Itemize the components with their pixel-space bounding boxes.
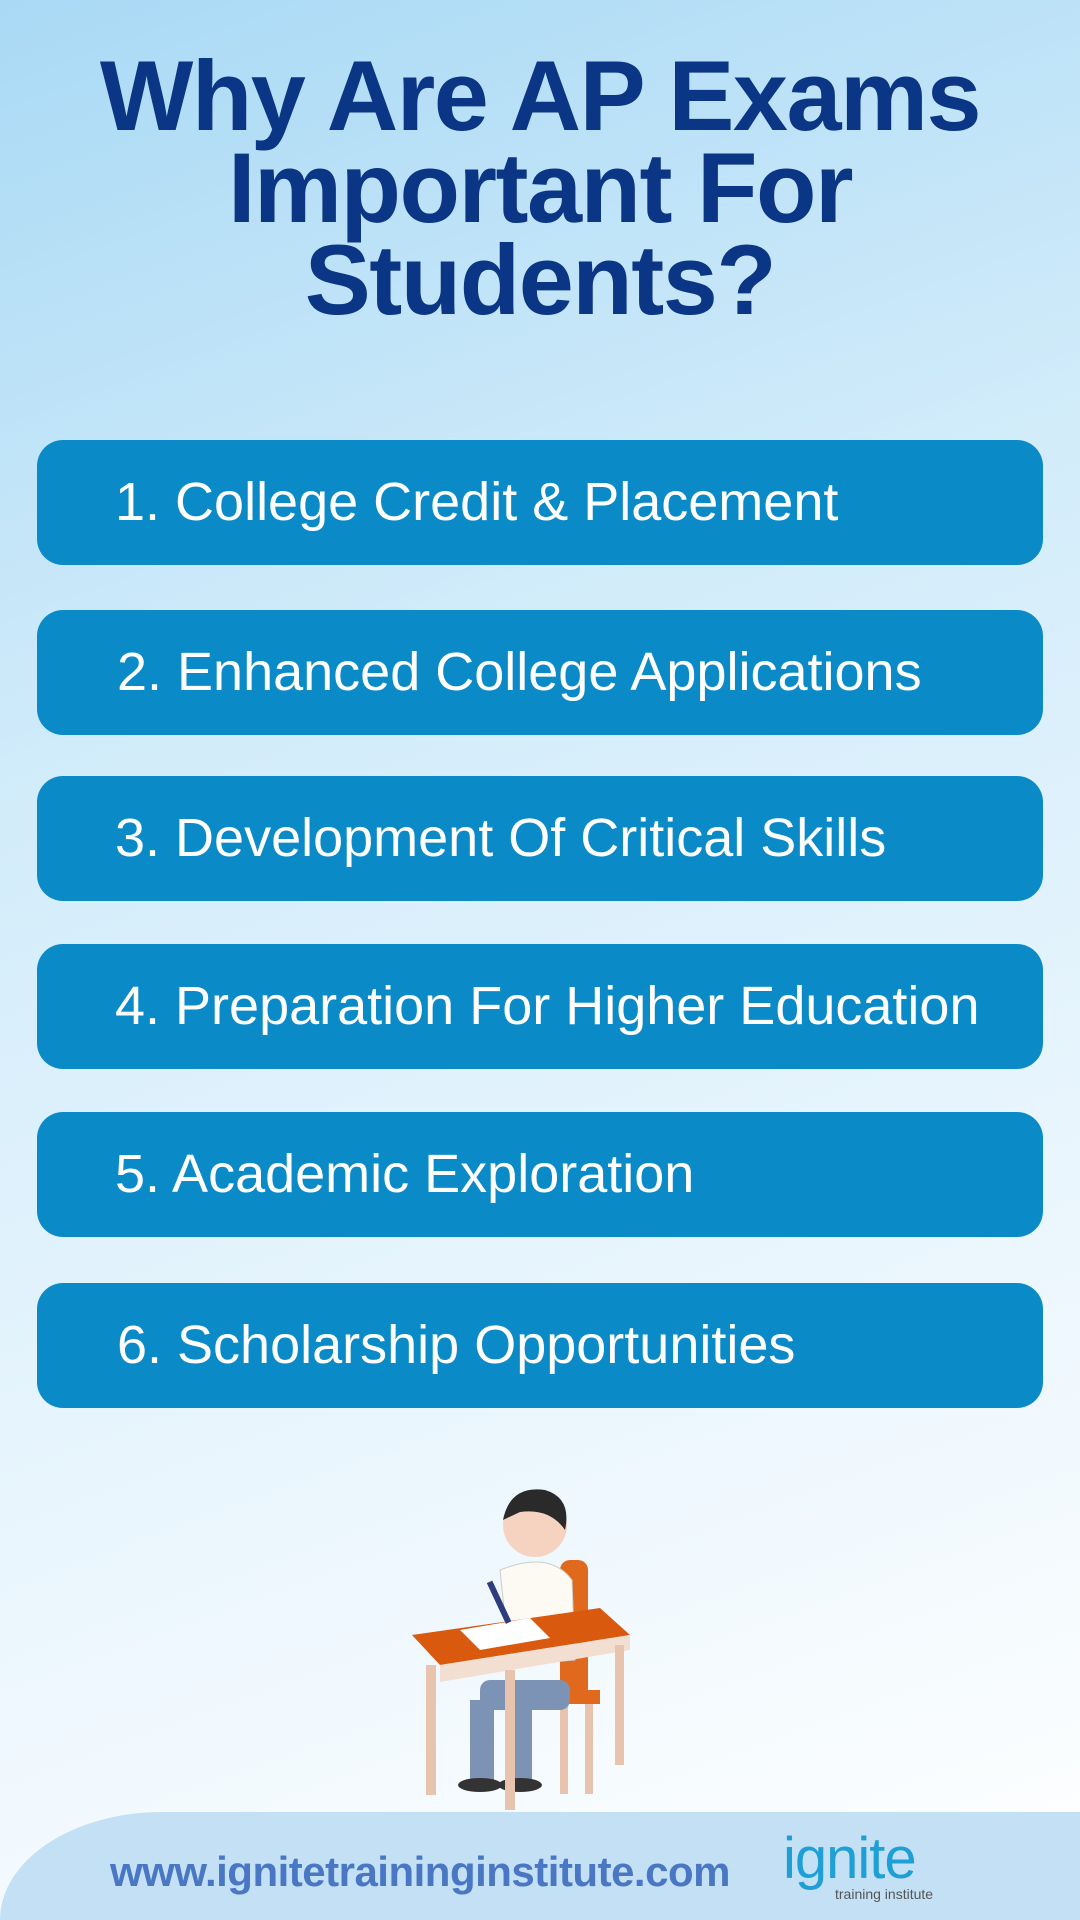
illustration: student at desk [412, 1489, 630, 1810]
footer band [0, 1812, 1080, 1920]
item 5 [37, 1112, 1043, 1237]
item 5: 5. Academic Exploration [115, 1144, 694, 1204]
item 3: 3. Development Of Critical Skills [115, 808, 886, 868]
desk [412, 1581, 630, 1810]
logo: ignite [783, 1826, 916, 1891]
legs [458, 1680, 570, 1792]
item 3 [37, 776, 1043, 901]
title: Important For [228, 132, 852, 243]
item 1 [37, 440, 1043, 565]
logo: training institute [835, 1886, 933, 1902]
title: Students? [305, 224, 775, 335]
title [100, 40, 980, 335]
item 4: 4. Preparation For Higher Education [115, 976, 979, 1036]
body [500, 1489, 575, 1665]
title: Why Are AP Exams [100, 40, 980, 151]
item 6: 6. Scholarship Opportunities [117, 1315, 795, 1375]
item 6 [37, 1283, 1043, 1408]
chair [550, 1560, 600, 1794]
website url: www.ignitetraininginstitute.com [110, 1848, 730, 1895]
item 2: 2. Enhanced College Applications [117, 642, 922, 702]
item 4 [37, 944, 1043, 1069]
item 1: 1. College Credit & Placement [115, 472, 838, 532]
item 2 [37, 610, 1043, 735]
